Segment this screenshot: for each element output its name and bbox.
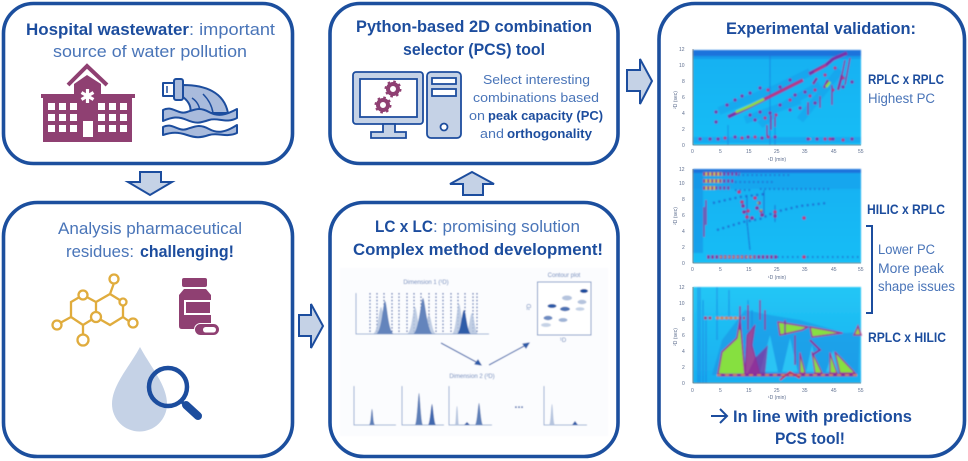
chart: dimension 2 chromatograms: Dimension 2 (²D): [449, 374, 495, 380]
heading: analysis challenge: [58, 220, 242, 261]
chart: RPLC x HILIC heatmap: 12: [679, 285, 685, 291]
chart: HILIC x RPLC heatmap: 10: [679, 181, 685, 187]
label: RPLC x HILIC: RPLC x HILIC: [868, 330, 946, 345]
conclusion: in line with predictions: In line with predictions: [733, 407, 912, 426]
chart: HILIC x RPLC heatmap: 35: [802, 267, 808, 273]
heading: hospital wastewater: Hospital wastewater: [26, 21, 190, 39]
chart: RPLC x HILIC heatmap: [673, 285, 864, 401]
chart: RPLC x RPLC heatmap: ²D (sec): [673, 91, 679, 109]
icon: hospital: [41, 66, 135, 142]
arrow: to dimension 2: [441, 343, 481, 365]
panel: experimental validation: [659, 4, 964, 456]
icon: desktop computer with gears: [353, 72, 461, 138]
chart: dimension 1 chromatogram: [356, 280, 489, 334]
text: selection criteria: combinations based: [473, 90, 599, 105]
text: selection criteria: Select interesting: [483, 72, 590, 87]
chart: contour plot: ²D: [527, 303, 533, 310]
conclusion: in line with predictions: PCS tool!: [775, 429, 845, 448]
text: lower PC note: [878, 242, 955, 294]
label: HILIC x RPLC: HILIC x RPLC: [867, 202, 945, 217]
icon: discharge pipe: [163, 79, 237, 137]
chart: HILIC x RPLC heatmap: ²D (sec): [673, 207, 679, 225]
panel: PCS tool: [330, 4, 618, 164]
chart: RPLC x RPLC heatmap: 4: [682, 111, 685, 117]
chart: contour plot: [527, 273, 591, 344]
bracket: lower PC group: [866, 226, 872, 313]
heading line two: PCS tool: selector (PCS) tool: [403, 41, 545, 59]
heading: LC x LC: Complex method development!: [353, 240, 603, 259]
text: selection criteria: [469, 72, 603, 141]
chart: HILIC x RPLC heatmap: 4: [682, 229, 685, 235]
chart: RPLC x RPLC heatmap: 45: [831, 149, 837, 155]
chart: dimension 2 chromatograms: ...: [514, 399, 524, 411]
text: selection criteria: peak capacity (PC): [488, 108, 603, 123]
chart: RPLC x RPLC heatmap: 2: [682, 127, 685, 133]
chart: dimension 1 chromatogram: Dimension 1 (¹D): [403, 280, 449, 286]
chart: HILIC x RPLC heatmap: 25: [774, 267, 780, 273]
chart: RPLC x HILIC heatmap: 35: [802, 388, 808, 394]
diagram: LC x LC workflow: [340, 268, 608, 436]
heading: LC x LC: : promising solution: [433, 217, 580, 236]
icon: water drop with magnifier: [112, 347, 198, 431]
chart: RPLC x RPLC heatmap: [673, 47, 864, 163]
chart: RPLC x HILIC heatmap: 4: [682, 349, 685, 355]
chart: RPLC x RPLC heatmap: 0: [682, 143, 685, 149]
chart: RPLC x HILIC heatmap: ¹D (min): [768, 395, 786, 401]
chart: HILIC x RPLC heatmap: 0: [682, 261, 685, 267]
chart: RPLC x RPLC heatmap: 55: [858, 149, 864, 155]
chart: RPLC x RPLC heatmap: 0: [691, 149, 694, 155]
icon: gears: [376, 82, 400, 112]
text: lower PC note: Lower PC: [878, 242, 935, 257]
arrow: right to validation panel: [627, 59, 652, 104]
text: selection criteria: on: [469, 108, 485, 123]
panel: hospital wastewater: [4, 4, 292, 164]
conclusion: in line with predictions: [711, 407, 912, 448]
heading: LC x LC: LC x LC: [375, 217, 433, 236]
label: RPLC x RPLC: Highest PC: [868, 91, 935, 106]
chart: RPLC x HILIC heatmap: ²D (sec): [673, 328, 679, 346]
chart: HILIC x RPLC heatmap: 2: [682, 245, 685, 251]
text: selection criteria: orthogonality: [507, 126, 593, 141]
chart: RPLC x HILIC heatmap: 55: [858, 388, 864, 394]
chart: RPLC x HILIC heatmap: 15: [746, 388, 752, 394]
chart: RPLC x HILIC heatmap: 2: [682, 365, 685, 371]
chart: RPLC x RPLC heatmap: 6: [682, 95, 685, 101]
icon: pill bottle: [179, 278, 220, 336]
chart: HILIC x RPLC heatmap: 15: [746, 267, 752, 273]
arrow: right to LC x LC panel: [299, 304, 323, 348]
chart: dimension 2 chromatograms: [354, 374, 587, 425]
chart: RPLC x RPLC heatmap: 15: [746, 149, 752, 155]
chart: RPLC x RPLC heatmap: 10: [679, 63, 685, 69]
label: RPLC x RPLC: [868, 72, 944, 106]
arrow: down to analysis panel: [128, 172, 172, 195]
label: RPLC x RPLC: RPLC x RPLC: [868, 72, 944, 87]
chart: HILIC x RPLC heatmap: 0: [691, 267, 694, 273]
chart: HILIC x RPLC heatmap: 8: [682, 197, 685, 203]
text: lower PC note: More peak: [878, 261, 944, 276]
chart: HILIC x RPLC heatmap: 55: [858, 267, 864, 273]
chart: HILIC x RPLC heatmap: 12: [679, 167, 685, 173]
text: lower PC note: shape issues: [878, 279, 955, 294]
panel: LC x LC: [330, 202, 618, 456]
heading: LC x LC: [353, 217, 603, 259]
heading: PCS tool: Python-based 2D combination: [356, 18, 592, 36]
heading: experimental validation: Experimental validation:: [726, 19, 916, 38]
chart: HILIC x RPLC heatmap: [673, 167, 864, 281]
chart: RPLC x HILIC heatmap: 6: [682, 333, 685, 339]
chart: RPLC x RPLC heatmap: 35: [802, 149, 808, 155]
chart: RPLC x HILIC heatmap: 0: [691, 388, 694, 394]
chart: RPLC x RPLC heatmap: 12: [679, 47, 685, 53]
text: selection criteria: and: [480, 126, 504, 141]
chart: RPLC x HILIC heatmap: 5: [719, 388, 722, 394]
heading: analysis challenge: challenging!: [140, 243, 234, 261]
chart: HILIC x RPLC heatmap: 5: [719, 267, 722, 273]
chart: HILIC x RPLC heatmap: 45: [831, 267, 837, 273]
arrow: up to PCS tool panel: [450, 172, 494, 195]
chart: RPLC x HILIC heatmap: 45: [831, 388, 837, 394]
icon: molecule: [52, 274, 138, 346]
chart: RPLC x HILIC heatmap: 8: [682, 317, 685, 323]
chart: RPLC x RPLC heatmap: ¹D (min): [768, 157, 786, 163]
chart: RPLC x HILIC heatmap: 25: [774, 388, 780, 394]
chart: RPLC x RPLC heatmap: 25: [774, 149, 780, 155]
chart: HILIC x RPLC heatmap: ¹D (min): [768, 275, 786, 281]
heading: hospital wastewater: : important: [189, 21, 275, 39]
panel: analysis pharmaceutical residues: [4, 202, 292, 456]
chart: HILIC x RPLC heatmap: 6: [682, 213, 685, 219]
heading: analysis challenge: residues:: [66, 243, 134, 261]
chart: RPLC x HILIC heatmap: 0: [682, 381, 685, 387]
heading: analysis challenge: Analysis pharmaceutical: [58, 220, 242, 238]
chart: contour plot: Contour plot: [548, 273, 581, 279]
chart: contour plot: ¹D: [560, 338, 567, 344]
heading: hospital wastewater: source of water pollution: [53, 43, 247, 61]
chart: RPLC x RPLC heatmap: 8: [682, 79, 685, 85]
chart: RPLC x HILIC heatmap: 10: [679, 301, 685, 307]
heading: hospital wastewater: [26, 21, 275, 61]
chart: RPLC x RPLC heatmap: 5: [719, 149, 722, 155]
arrow: to contour plot: [489, 343, 529, 365]
